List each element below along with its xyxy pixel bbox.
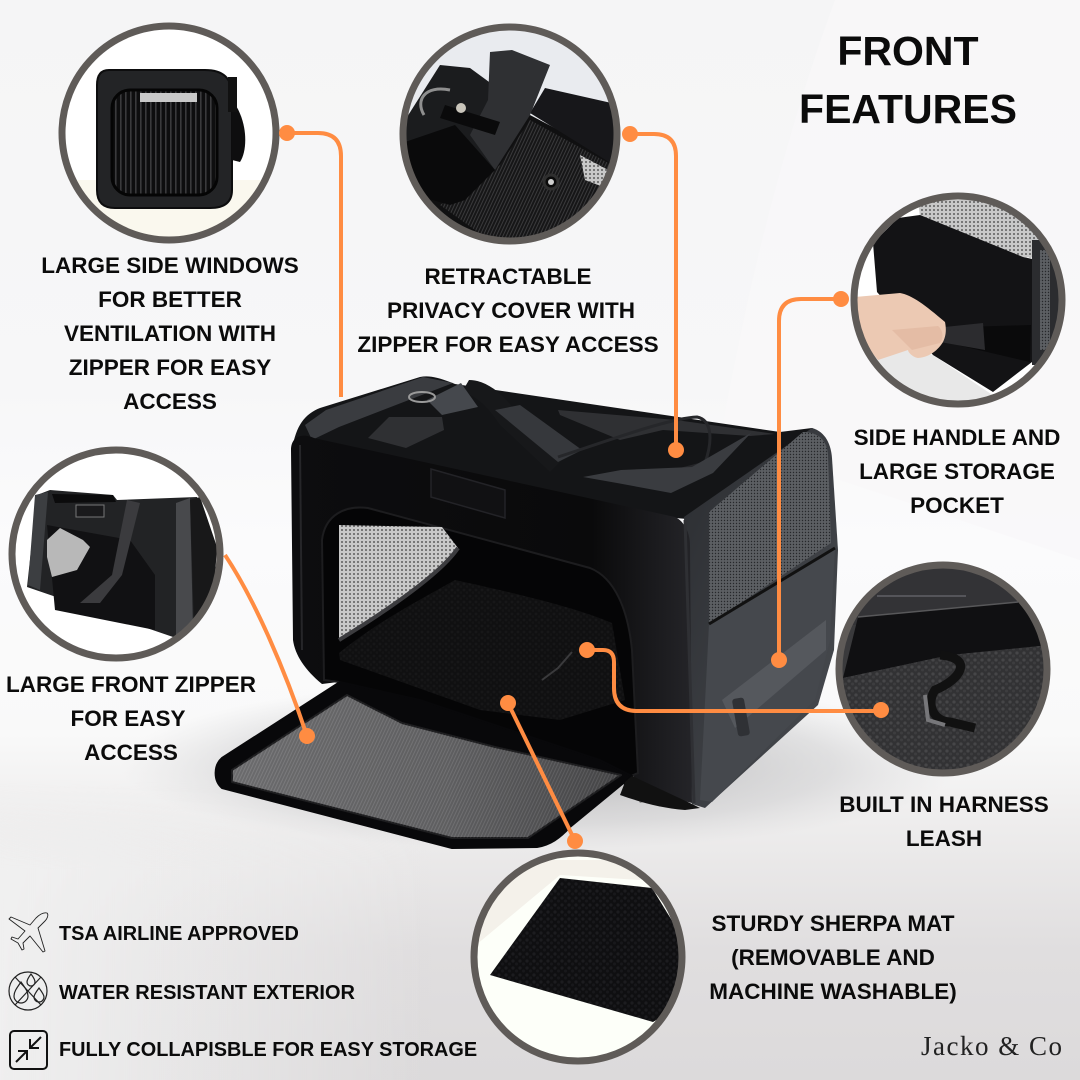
label: front zipper: LARGE FRONT ZIPPER <box>6 672 256 697</box>
label: harness leash: LEASH <box>906 826 982 851</box>
handles and straps <box>462 380 562 472</box>
strap <box>440 105 500 135</box>
side of bag <box>406 65 494 170</box>
label: sherpa mat: STURDY SHERPA MAT <box>712 911 955 936</box>
label: side windows: ACCESS <box>123 389 217 414</box>
label: harness leash: BUILT IN HARNESS <box>839 792 1049 817</box>
hand <box>855 293 946 360</box>
bag front panel <box>291 436 692 803</box>
bag side panel <box>684 428 838 808</box>
leash <box>931 655 975 728</box>
open door <box>216 682 632 848</box>
label: privacy cover: PRIVACY COVER WITH <box>387 298 635 323</box>
icon: water resistant <box>9 972 47 1010</box>
title: FEATURES <box>799 86 1017 132</box>
mesh panel <box>430 115 610 238</box>
door mesh <box>232 695 621 838</box>
rolled cover <box>470 50 550 170</box>
logo patch <box>431 469 505 518</box>
text: TSA: TSA AIRLINE APPROVED <box>59 923 299 945</box>
connector: side handle <box>771 291 849 668</box>
label: privacy cover: ZIPPER FOR EASY ACCESS <box>357 332 659 357</box>
label: side handle: SIDE HANDLE AND <box>854 425 1060 450</box>
side mesh window <box>709 432 831 624</box>
front opening <box>322 507 638 790</box>
carrier side <box>97 70 232 208</box>
buckle <box>368 417 444 448</box>
carrier bag photo <box>216 376 838 848</box>
connector: front zipper <box>225 555 315 744</box>
door interior <box>47 525 155 630</box>
zip flap <box>530 88 614 162</box>
circle: sherpa mat <box>460 853 690 1061</box>
connector: privacy cover <box>622 126 684 458</box>
circle: side handle and pocket <box>854 196 1064 420</box>
label: side windows: VENTILATION WITH <box>64 321 276 346</box>
label: sherpa mat: MACHINE WASHABLE) <box>709 979 957 1004</box>
circle: privacy cover <box>400 27 625 250</box>
label: sherpa mat: (REMOVABLE AND <box>731 945 935 970</box>
brand wordmark: Jacko & Co <box>921 1031 1064 1061</box>
title: FRONT <box>837 28 979 74</box>
text: collapsible: FULLY COLLAPISBLE FOR EASY STORAGE <box>59 1039 477 1061</box>
text: water resistant: WATER RESISTANT EXTERIOR <box>59 982 355 1004</box>
label: front zipper: ACCESS <box>84 740 178 765</box>
strap <box>80 500 140 603</box>
connector: harness <box>579 642 889 718</box>
window mesh <box>112 90 217 195</box>
background <box>0 716 1080 1080</box>
label: side handle: POCKET <box>910 493 1004 518</box>
bag top panel <box>292 376 831 520</box>
label: privacy cover: RETRACTABLE <box>424 264 592 289</box>
icon: airplane <box>9 913 48 952</box>
side pocket <box>700 548 835 802</box>
connector: sherpa mat <box>500 695 583 849</box>
sherpa mat <box>339 580 625 720</box>
label: side windows: LARGE SIDE WINDOWS <box>41 253 299 278</box>
circle: front zipper <box>12 450 220 658</box>
label: side handle: LARGE STORAGE <box>859 459 1055 484</box>
leash clip <box>542 652 572 680</box>
handle strap <box>965 325 1031 362</box>
label: side windows: FOR BETTER <box>98 287 242 312</box>
circle: harness leash <box>830 560 1060 780</box>
icon: collapse <box>10 1031 47 1069</box>
label: front zipper: FOR EASY <box>70 706 186 731</box>
bag bottom <box>620 776 700 810</box>
D ring <box>409 392 435 402</box>
zipper pull <box>633 776 648 803</box>
interior mesh window <box>339 525 458 640</box>
label: side windows: ZIPPER FOR EASY <box>69 355 271 380</box>
title <box>799 28 1017 132</box>
connector: side windows <box>279 125 341 397</box>
circle: side window <box>60 26 280 250</box>
